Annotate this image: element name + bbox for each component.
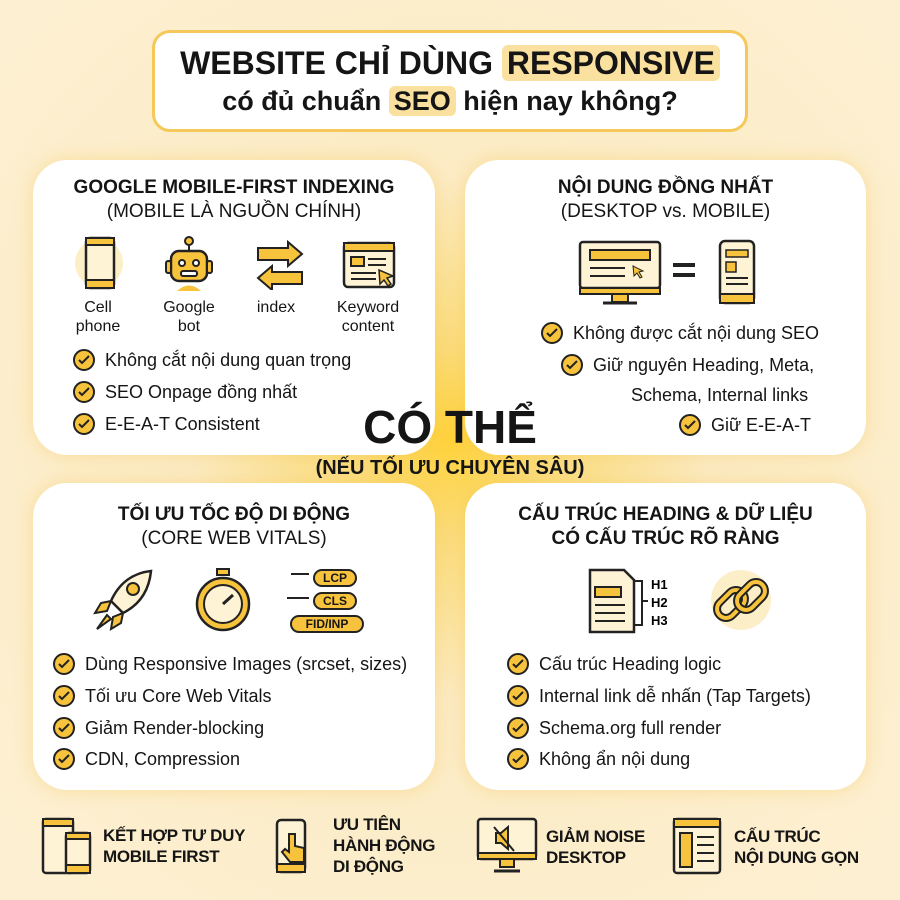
icon: H1 H2 H3 document — [588, 568, 668, 634]
title box — [152, 30, 748, 132]
bottom item: mobile first — [42, 818, 246, 874]
checklist: Cấu trúc Heading logic — [539, 654, 721, 674]
icon: cell phone — [75, 236, 123, 290]
bottom item: mobile action: ƯU TIÊN — [333, 815, 401, 834]
bottom item: mobile first: KẾT HỢP TƯ DUY — [103, 826, 245, 845]
center verdict: (NẾU TỐI ƯU CHUYÊN SÂU) — [316, 457, 584, 479]
bottom item: compact content: CẤU TRÚC — [734, 827, 820, 846]
panel: content consistent: Giữ nguyên Heading, Meta, — [593, 355, 814, 375]
center verdict: CÓ THỂ — [363, 401, 537, 453]
icon: H1 H2 H3 document: H3 — [651, 613, 668, 628]
title box: có đủ chuẩn SEO hiện nay không? — [222, 86, 678, 116]
icon: link chain — [711, 570, 771, 630]
heading: NỘI DUNG ĐỒNG NHẤT — [558, 177, 773, 198]
panel: mobile-first indexing — [33, 160, 435, 455]
heading: TỐI ƯU TỐC ĐỘ DI ĐỘNG — [118, 504, 350, 525]
icon: desktop = mobile — [578, 240, 756, 304]
panel: heading structure: Schema.org full render — [539, 718, 721, 738]
labels — [76, 299, 120, 335]
heading: CẤU TRÚC HEADING & DỮ LIỆU — [518, 504, 813, 525]
labels: Cell — [84, 299, 112, 316]
bottom item: reduce desktop noise — [476, 818, 645, 872]
subheading: (DESKTOP vs. MOBILE) — [561, 201, 770, 222]
bottom item: mobile action — [276, 815, 435, 876]
checklist: Không được cắt nội dung SEO — [573, 323, 819, 343]
panel: content consistent — [465, 160, 866, 455]
subheading: (CORE WEB VITALS) — [141, 528, 327, 549]
panel: mobile-first indexing: Google — [163, 299, 215, 316]
panel: mobile-first indexing: Keyword — [337, 299, 399, 316]
center verdict — [316, 401, 584, 479]
heading — [518, 502, 813, 549]
icon: LCP CLS FID: LCP — [323, 571, 347, 585]
bottom item: compact content — [672, 818, 859, 874]
icon: stopwatch — [196, 568, 250, 632]
bottom item: reduce desktop noise: DESKTOP — [546, 848, 626, 867]
panel: mobile speed: Giảm Render-blocking — [85, 718, 264, 738]
checklist: Không cắt nội dung quan trọng — [105, 350, 351, 370]
panel: mobile speed: CDN, Compression — [85, 749, 240, 769]
panel: mobile-first indexing: E-E-A-T Consistent — [105, 414, 260, 434]
checklist: Dùng Responsive Images (srcset, sizes) — [85, 654, 407, 674]
icon: keyword content — [342, 242, 396, 288]
bottom item: mobile action: DI ĐỘNG — [333, 857, 404, 876]
panel: heading structure — [465, 483, 866, 790]
labels: phone — [76, 318, 120, 335]
panel: content consistent: Schema, Internal links — [631, 385, 808, 405]
panel: mobile-first indexing: SEO Onpage đồng nhất — [105, 382, 297, 402]
icon: LCP CLS FID: CLS — [323, 594, 347, 608]
panel: mobile-first indexing: index — [257, 299, 295, 316]
panel: heading structure: Internal link dễ nhấn (Tap Targets) — [539, 686, 811, 706]
bottom item: mobile first: MOBILE FIRST — [103, 847, 219, 866]
panel: heading structure: Không ẩn nội dung — [539, 749, 690, 769]
subheading: (MOBILE LÀ NGUỒN CHÍNH) — [107, 201, 361, 222]
icon: google bot — [165, 236, 213, 291]
bottom item: reduce desktop noise: GIẢM NOISE — [546, 827, 645, 846]
panel: mobile-first indexing: bot — [178, 318, 200, 335]
heading: CÓ CẤU TRÚC RÕ RÀNG — [552, 528, 780, 549]
bottom item: mobile action: HÀNH ĐỘNG — [333, 836, 435, 855]
icon: index arrows — [256, 240, 304, 290]
icon: H1 H2 H3 document: H1 — [651, 577, 668, 592]
panel: mobile-first indexing: content — [342, 318, 394, 335]
heading: GOOGLE MOBILE-FIRST INDEXING — [74, 177, 394, 198]
icon: H1 H2 H3 document: H2 — [651, 595, 668, 610]
icon: LCP CLS FID — [287, 569, 364, 633]
icon: LCP CLS FID: FID/INP — [306, 617, 348, 631]
icon: rocket — [93, 570, 152, 631]
panel: mobile speed — [33, 483, 435, 790]
panel: mobile speed: Tối ưu Core Web Vitals — [85, 686, 271, 706]
panel: content consistent: Giữ E-E-A-T — [711, 415, 811, 435]
bottom item: compact content: NỘI DUNG GỌN — [734, 848, 859, 867]
title box: WEBSITE CHỈ DÙNG RESPONSIVE — [180, 45, 715, 81]
